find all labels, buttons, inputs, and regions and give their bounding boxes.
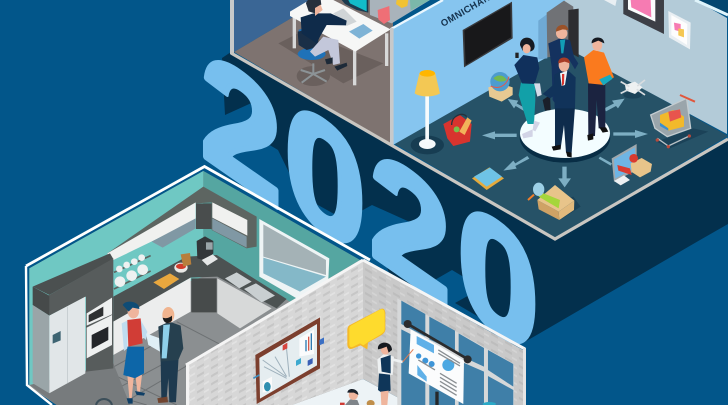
back room wall xyxy=(232,0,322,52)
arrow upper right xyxy=(604,99,625,111)
chair blue trim xyxy=(299,28,318,35)
green folders xyxy=(410,0,430,11)
neck and ear xyxy=(315,5,323,16)
arm xyxy=(543,83,555,98)
screen stand xyxy=(435,392,439,405)
board xyxy=(259,324,317,399)
jacket xyxy=(377,354,394,375)
basket handle xyxy=(452,114,467,125)
projector screen xyxy=(409,329,464,404)
room: kitchen xyxy=(29,171,360,405)
desk legs xyxy=(293,17,388,85)
locker front xyxy=(547,1,573,57)
cart wheels xyxy=(656,134,691,148)
hair xyxy=(556,25,568,32)
chair base xyxy=(297,63,330,86)
arrow left xyxy=(482,131,517,139)
skirt xyxy=(378,370,391,394)
coffee machine tray xyxy=(202,254,218,266)
shoes xyxy=(127,398,133,404)
locker side xyxy=(568,9,579,57)
shoes xyxy=(334,63,347,71)
oven window xyxy=(92,327,108,349)
right wall xyxy=(203,171,360,302)
parcel right xyxy=(559,201,574,220)
board lines xyxy=(263,343,289,378)
window glass xyxy=(263,258,326,292)
icon: shopping cart xyxy=(651,95,708,148)
store left wall xyxy=(393,0,572,145)
parcel left xyxy=(537,200,559,220)
pie note xyxy=(263,377,272,393)
person: seated attendee xyxy=(345,389,359,405)
keyboard xyxy=(614,175,630,185)
monitor xyxy=(342,0,368,13)
second leg xyxy=(135,375,142,392)
digit 0 second: 0 xyxy=(457,160,539,395)
jacket xyxy=(158,322,183,362)
second shoe xyxy=(325,57,333,64)
shoes xyxy=(157,397,168,403)
small art yellow xyxy=(678,28,684,37)
chart bars xyxy=(308,337,309,351)
globe ring xyxy=(491,77,509,87)
cart handle xyxy=(680,95,695,102)
icon: drone xyxy=(621,80,645,99)
corner of background at upper right xyxy=(695,0,728,16)
small frame xyxy=(668,11,691,49)
attendee hair xyxy=(347,389,358,395)
top xyxy=(584,50,614,85)
board frame xyxy=(255,317,320,404)
chair legs xyxy=(301,63,327,83)
fridge tower top xyxy=(33,253,113,295)
head xyxy=(559,58,569,72)
platform shadow xyxy=(520,112,610,163)
arrow down xyxy=(558,167,571,187)
hair xyxy=(558,57,570,63)
fridge tower side xyxy=(48,258,113,372)
collar xyxy=(560,39,565,53)
speech bubble xyxy=(349,309,385,347)
wall top right xyxy=(363,260,525,349)
person: man behind xyxy=(543,25,578,111)
person: woman in red vest xyxy=(122,302,147,404)
icon: shirt box xyxy=(472,167,504,190)
knife block xyxy=(181,253,191,267)
fridge front xyxy=(49,297,85,393)
left brick wall xyxy=(188,261,363,405)
pink art xyxy=(631,0,651,17)
person: man in orange xyxy=(584,37,614,141)
screen dots xyxy=(416,353,435,367)
icon: tv xyxy=(463,2,513,67)
right wall top edge xyxy=(695,0,728,15)
fruit bowl xyxy=(174,263,188,273)
cabinet underside glass right xyxy=(212,218,247,248)
chair shadow xyxy=(297,66,330,86)
people: shoppers xyxy=(514,25,614,157)
icon: small floor item xyxy=(96,399,112,405)
wall end cap xyxy=(523,348,526,405)
legs xyxy=(161,357,179,402)
arm xyxy=(534,83,542,97)
digit 0: 0 xyxy=(284,59,366,294)
shirt box base xyxy=(472,167,504,190)
store floor xyxy=(393,45,728,238)
second shoe xyxy=(135,391,145,396)
head xyxy=(128,305,139,318)
screen pie xyxy=(442,359,454,371)
floor darker zone xyxy=(30,363,130,405)
oven xyxy=(87,315,112,358)
cutting board xyxy=(153,273,179,289)
floor tiles xyxy=(57,322,253,405)
window frame xyxy=(397,298,514,405)
legs xyxy=(519,83,535,124)
plinth rim xyxy=(231,53,728,239)
head xyxy=(556,28,567,39)
wall top edge xyxy=(391,0,443,29)
cart basket xyxy=(651,98,691,137)
shoes xyxy=(522,129,533,138)
red binder xyxy=(378,6,390,24)
hair xyxy=(123,302,139,312)
attendee second head xyxy=(367,400,375,405)
magnifier xyxy=(533,183,544,196)
oven top xyxy=(87,298,112,326)
legs xyxy=(555,107,575,153)
arrow right xyxy=(613,130,648,138)
chart bars blue xyxy=(305,333,312,351)
arrow lower left xyxy=(503,156,529,171)
products xyxy=(472,72,708,220)
drone body xyxy=(625,82,643,94)
torso xyxy=(301,13,347,43)
left wall xyxy=(29,171,203,385)
window blinds xyxy=(263,224,326,275)
bowls xyxy=(115,254,148,287)
legs xyxy=(588,83,605,136)
shoes xyxy=(552,145,561,151)
shirt xyxy=(162,324,170,358)
store right wall xyxy=(565,0,727,134)
dark shoe xyxy=(543,95,551,111)
teal seat xyxy=(483,402,496,405)
second shoe xyxy=(566,152,572,157)
baguette xyxy=(459,117,472,135)
screen chart blocks xyxy=(417,336,434,353)
corner lower xyxy=(191,278,217,312)
icon: floor lamp xyxy=(411,70,444,154)
vest xyxy=(381,355,391,373)
cart frame xyxy=(651,98,691,137)
top xyxy=(514,55,539,84)
lower cabinets right xyxy=(217,278,272,328)
second sink xyxy=(244,283,275,302)
wall top left xyxy=(186,260,363,365)
yellow box xyxy=(396,0,408,8)
shirt xyxy=(560,71,567,86)
red arm xyxy=(617,165,632,175)
monitor back xyxy=(612,144,637,182)
monitor screen xyxy=(614,147,635,178)
fridge panel xyxy=(53,331,61,344)
jacket xyxy=(554,71,576,108)
box xyxy=(488,83,513,102)
corner cabinet xyxy=(196,203,212,229)
face xyxy=(523,44,531,53)
small picture xyxy=(671,15,687,45)
megaphone xyxy=(629,154,638,163)
chair back xyxy=(298,28,318,50)
monitor screen xyxy=(348,0,367,11)
icon: shopping basket xyxy=(443,114,472,146)
arm right xyxy=(141,320,147,340)
arrow lower right xyxy=(599,157,612,166)
vest xyxy=(127,318,143,347)
microwave xyxy=(89,307,103,322)
icon: globe box xyxy=(488,72,513,102)
sinks xyxy=(225,272,252,288)
tie xyxy=(562,74,564,86)
right brick wall xyxy=(363,261,523,405)
window frame xyxy=(259,219,329,298)
rod ends xyxy=(404,320,472,363)
coffee machine xyxy=(197,236,218,266)
face xyxy=(381,343,390,355)
handle xyxy=(528,195,534,200)
small art pink xyxy=(674,23,681,32)
cart bottom xyxy=(657,136,689,146)
fridge side xyxy=(33,305,49,393)
fridge seam xyxy=(66,307,68,383)
tower left xyxy=(33,287,49,316)
panel: whiteboard and presenter xyxy=(253,298,514,405)
arrows xyxy=(482,99,648,187)
hair xyxy=(520,38,535,51)
pointer xyxy=(403,349,413,362)
arm left xyxy=(122,320,128,351)
person: woman with phone xyxy=(514,38,542,138)
countertop xyxy=(113,255,287,322)
window panes xyxy=(401,301,513,405)
upper cabinets left xyxy=(107,202,196,262)
tv screen xyxy=(464,4,511,65)
room: meeting room xyxy=(186,260,526,405)
chair seat xyxy=(298,48,326,60)
attendee body xyxy=(345,399,359,405)
parcel shadow xyxy=(540,197,581,220)
platform xyxy=(520,109,610,163)
blue note 2 xyxy=(308,358,313,366)
phone xyxy=(515,53,519,58)
shirt xyxy=(474,168,502,187)
heading digits: 2020 xyxy=(200,10,539,395)
attendee head xyxy=(349,390,358,400)
chart paper xyxy=(299,329,314,357)
digit 2: 2 xyxy=(200,10,282,245)
lamp shade xyxy=(415,70,440,96)
icon: pictures on wall xyxy=(604,0,691,49)
lamp pole xyxy=(425,93,429,142)
meeting floor xyxy=(292,379,412,405)
package xyxy=(631,158,652,177)
left room edge xyxy=(230,0,234,54)
shoes xyxy=(587,133,593,141)
screen bars xyxy=(417,365,427,382)
globe xyxy=(490,72,510,91)
lamp shadow xyxy=(411,136,444,154)
partition edge xyxy=(390,28,394,144)
projector screen rod xyxy=(407,323,468,359)
platform disc xyxy=(520,109,610,158)
hair xyxy=(306,0,321,13)
legs xyxy=(381,391,389,405)
picture large xyxy=(628,0,655,22)
tablet xyxy=(599,75,613,85)
blue goods xyxy=(660,123,668,131)
fruit xyxy=(176,264,186,269)
arrow upper left xyxy=(508,99,526,111)
back room floor xyxy=(234,0,393,145)
attendee red top xyxy=(340,403,345,405)
room: omnichannel store xyxy=(230,0,728,239)
panel: desk worker xyxy=(278,0,430,86)
frame large xyxy=(623,0,664,34)
desk shadow xyxy=(278,32,383,83)
coffee detail xyxy=(206,242,213,250)
lower cabinets xyxy=(113,278,191,355)
icon: locker xyxy=(538,1,579,59)
keyboard xyxy=(333,8,357,26)
second shoe xyxy=(533,121,540,131)
red note xyxy=(283,343,287,351)
icon: parcel with magnifier xyxy=(528,183,581,220)
red goods xyxy=(668,109,681,122)
left cap xyxy=(186,364,189,405)
upper cabinets right xyxy=(212,202,247,236)
blue note xyxy=(296,358,301,366)
skirt xyxy=(123,347,144,378)
second shoe xyxy=(599,127,608,133)
head xyxy=(162,307,174,323)
tablet on desk xyxy=(349,24,373,39)
wall marker xyxy=(253,375,259,378)
lamp base xyxy=(419,139,436,149)
hair xyxy=(592,37,604,43)
screen text lines xyxy=(418,350,460,395)
vegetable xyxy=(454,126,460,132)
parcel top xyxy=(537,185,574,212)
icon: monitor with package xyxy=(612,144,652,185)
pie xyxy=(264,382,271,391)
legs xyxy=(127,375,134,398)
upper soffit xyxy=(107,187,257,254)
document xyxy=(146,333,160,352)
person: bald man xyxy=(146,307,183,403)
drone shadow xyxy=(623,91,642,99)
globe land xyxy=(493,75,507,82)
speech bubble side xyxy=(347,309,385,349)
face xyxy=(592,39,602,51)
person: presenter xyxy=(377,343,413,405)
label xyxy=(539,192,560,208)
back wall items xyxy=(370,0,430,23)
arm xyxy=(392,359,403,362)
digit 2 second: 2 xyxy=(369,109,451,344)
tiny frame xyxy=(604,0,617,6)
hair xyxy=(378,343,392,353)
beard xyxy=(163,316,172,323)
kitchen outline xyxy=(26,166,370,405)
cabinet underside glass xyxy=(152,218,196,248)
lamp top xyxy=(420,70,435,77)
dark isometric plinth xyxy=(222,52,728,343)
desk top xyxy=(290,0,391,52)
legs xyxy=(310,37,340,65)
drone rotors xyxy=(621,80,645,95)
kitchen silhouette xyxy=(29,171,360,405)
cart shadow xyxy=(657,128,708,148)
blue tag xyxy=(319,337,324,345)
cart goods xyxy=(660,110,684,131)
shelves xyxy=(114,256,151,289)
person: man in suit xyxy=(543,57,576,157)
